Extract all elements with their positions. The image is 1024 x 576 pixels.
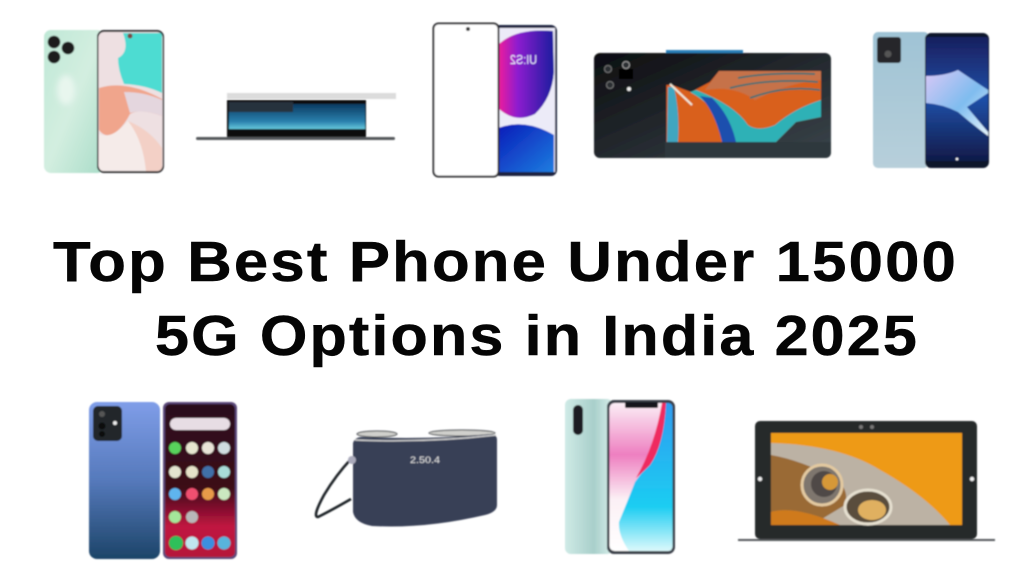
wallpaper clock text: UI:S2 <box>510 52 537 67</box>
title: 5G Options in India 2025 <box>155 304 919 368</box>
app icons <box>169 442 230 550</box>
power bank bag: navy with strap <box>316 430 497 527</box>
laptop: thin silver with blue screen <box>196 93 396 140</box>
tablet: black with orange and teal artwork <box>594 50 831 158</box>
title <box>53 230 958 368</box>
laptop: dark bezel with orange swirl wallpaper <box>738 421 995 541</box>
phone: blue with app grid screen <box>89 402 237 559</box>
phone: mint green with three cameras <box>44 30 164 173</box>
phone: pale green with pink and blue wave <box>565 399 675 554</box>
bag label: 2.50.4 <box>410 455 440 465</box>
phone: white front with purple wallpaper <box>434 24 557 176</box>
title: Top Best Phone Under 15000 <box>53 230 958 294</box>
phone: pale blue with dark chevron screen <box>873 32 989 168</box>
